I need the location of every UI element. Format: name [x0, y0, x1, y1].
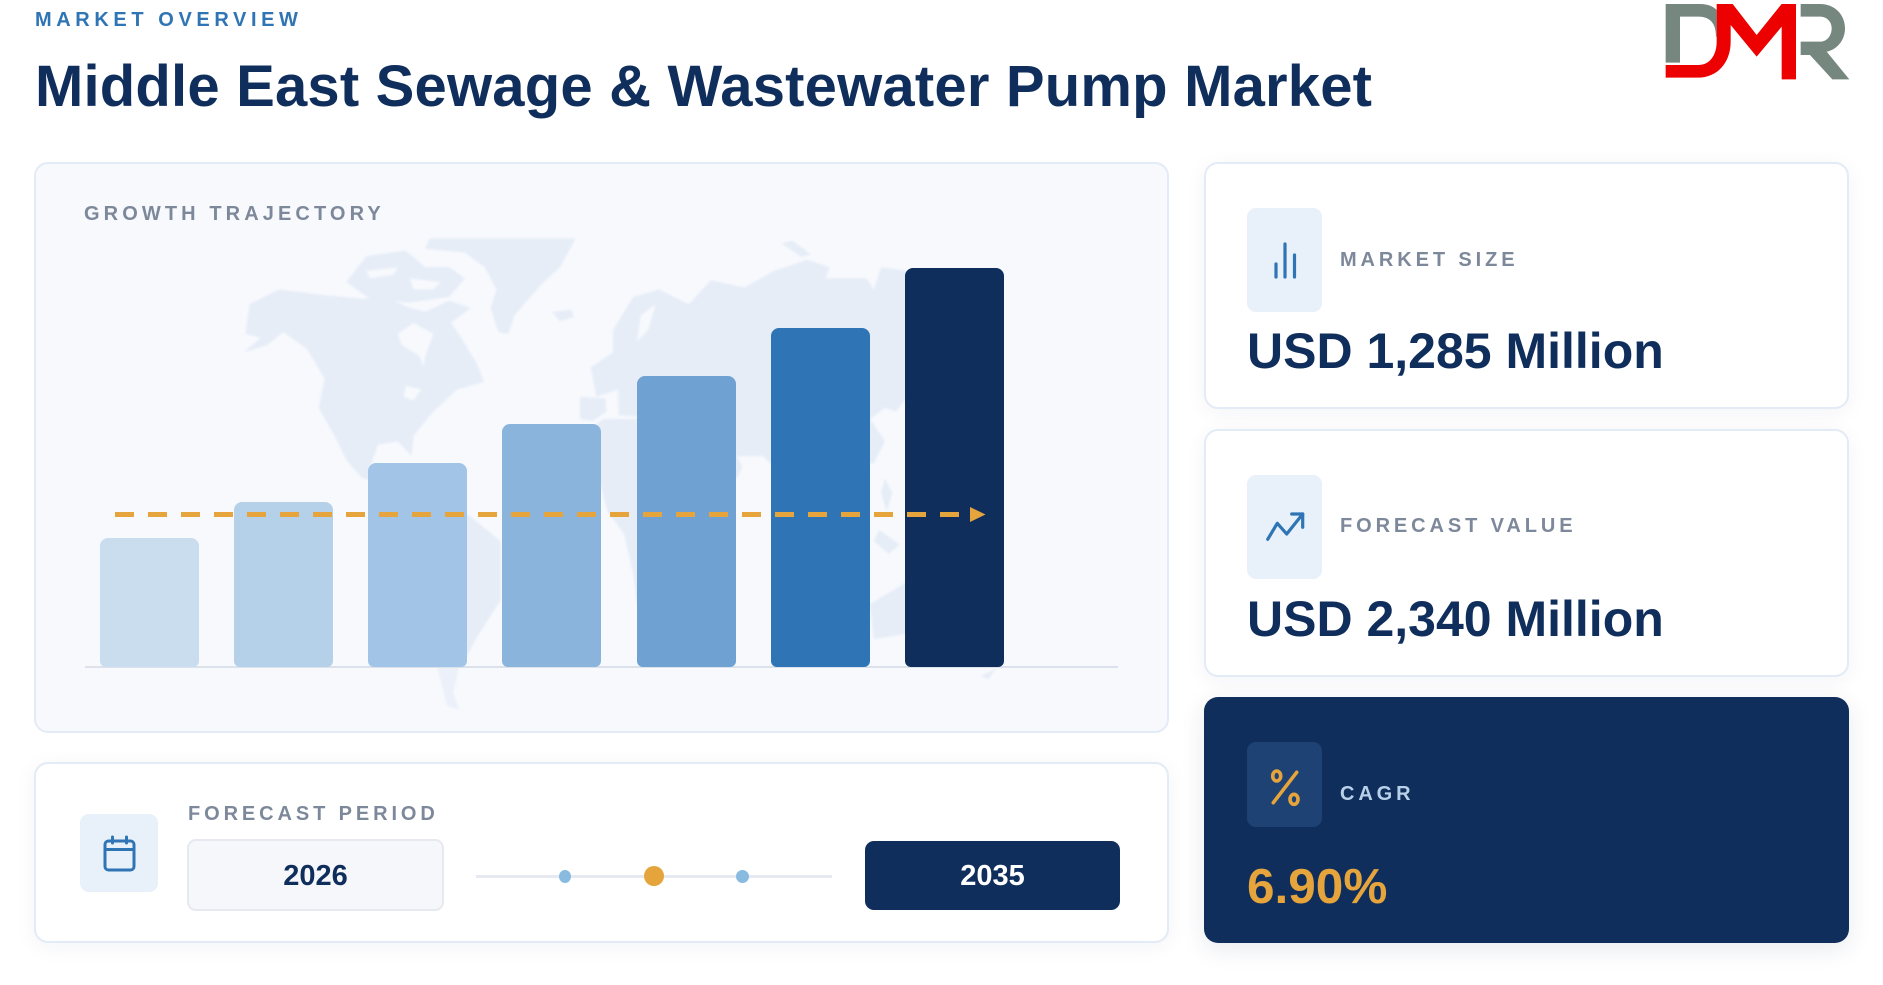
timeline: [476, 866, 832, 886]
start year box: [187, 839, 444, 911]
end year box: [865, 841, 1120, 910]
start year box: 2026: [283, 860, 348, 892]
bar 6: [771, 328, 870, 667]
bar chart: [100, 268, 1004, 667]
panel: market size: [1204, 162, 1849, 409]
timeline dot 2: [736, 870, 749, 882]
icon: percent: [1247, 742, 1322, 827]
label: market size: MARKET SIZE: [1340, 249, 1518, 271]
eyebrow label: MARKET OVERVIEW: [35, 9, 303, 31]
end year box: 2035: [960, 860, 1025, 892]
timeline dot: midpoint: [644, 866, 664, 886]
timeline dot 1: [559, 870, 571, 882]
value: CAGR: 6.90%: [1247, 859, 1387, 914]
timeline track: [476, 874, 832, 878]
label: forecast period: FORECAST PERIOD: [188, 803, 439, 825]
label: CAGR: CAGR: [1340, 783, 1414, 805]
title: Middle East Sewage & Wastewater Pump Market: [35, 54, 1372, 119]
value: forecast value: USD 2,340 Million: [1247, 591, 1664, 647]
icon: trend up: [1247, 475, 1322, 579]
bar 7: [905, 268, 1004, 667]
bar 5: [637, 376, 736, 667]
panel: forecast value: [1204, 429, 1849, 677]
icon: bar chart: [1247, 208, 1322, 312]
bar 1: [100, 538, 199, 667]
panel heading: growth trajectory: GROWTH TRAJECTORY: [84, 203, 385, 225]
label: forecast value: FORECAST VALUE: [1340, 515, 1576, 537]
logo: DMR: [1666, 4, 1850, 80]
bar chart baseline: [85, 666, 1118, 668]
value: market size: USD 1,285 Million: [1247, 323, 1664, 379]
bar 3: [368, 463, 467, 667]
bar 4: [502, 424, 601, 667]
panel: growth trajectory: [34, 162, 1169, 733]
panel: CAGR: [1204, 697, 1849, 943]
panel: forecast period: [34, 762, 1169, 943]
bar 2: [234, 502, 333, 667]
icon: calendar: [80, 814, 158, 892]
